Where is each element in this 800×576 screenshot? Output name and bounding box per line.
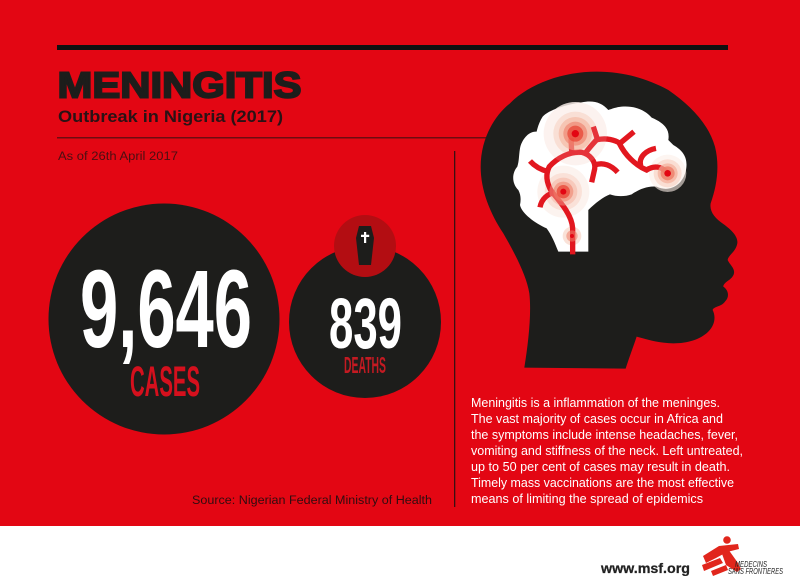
brain [513,101,687,252]
cases number: 9,646 [80,248,252,371]
cases circle: CASES [130,358,200,406]
blood vessels [530,127,668,254]
description text: the symptoms include intense headaches, fever, [471,428,738,442]
icon: coffin badge [334,215,396,277]
footer band [0,526,800,576]
description text: Meningitis is a inflammation of the meninges. [471,396,720,410]
top rule [57,45,728,50]
description text: vomiting and stiffness of the neck. Left untreated, [471,444,743,458]
description text: up to 50 per cent of cases may result in death. [471,460,730,474]
description text: means of limiting the spread of epidemics [471,492,703,506]
subtitle: Outbreak in Nigeria (2017) [58,107,283,126]
icon: MSF logo [702,536,783,576]
header divider [57,137,487,138]
description text [471,396,743,506]
head with brain illustration [481,72,737,369]
description text: The vast majority of cases occur in Africa and [471,412,723,426]
description text: Timely mass vaccinations are the most effective [471,476,734,490]
title: MENINGITIS [58,64,302,106]
logo wordmark: MEDECINS [735,559,767,569]
head silhouette [481,72,737,369]
inflammation spots [544,102,678,242]
date note: As of 26th April 2017 [58,151,178,163]
deaths circle: DEATHS [344,352,386,378]
website url: www.msf.org [600,560,690,576]
source note: Source: Nigerian Federal Ministry of Health [192,493,432,507]
deaths circle [289,246,441,398]
pale inflammation halos [537,102,686,245]
vertical divider [454,151,455,507]
deaths number: 839 [329,285,402,364]
cases circle [48,204,280,434]
